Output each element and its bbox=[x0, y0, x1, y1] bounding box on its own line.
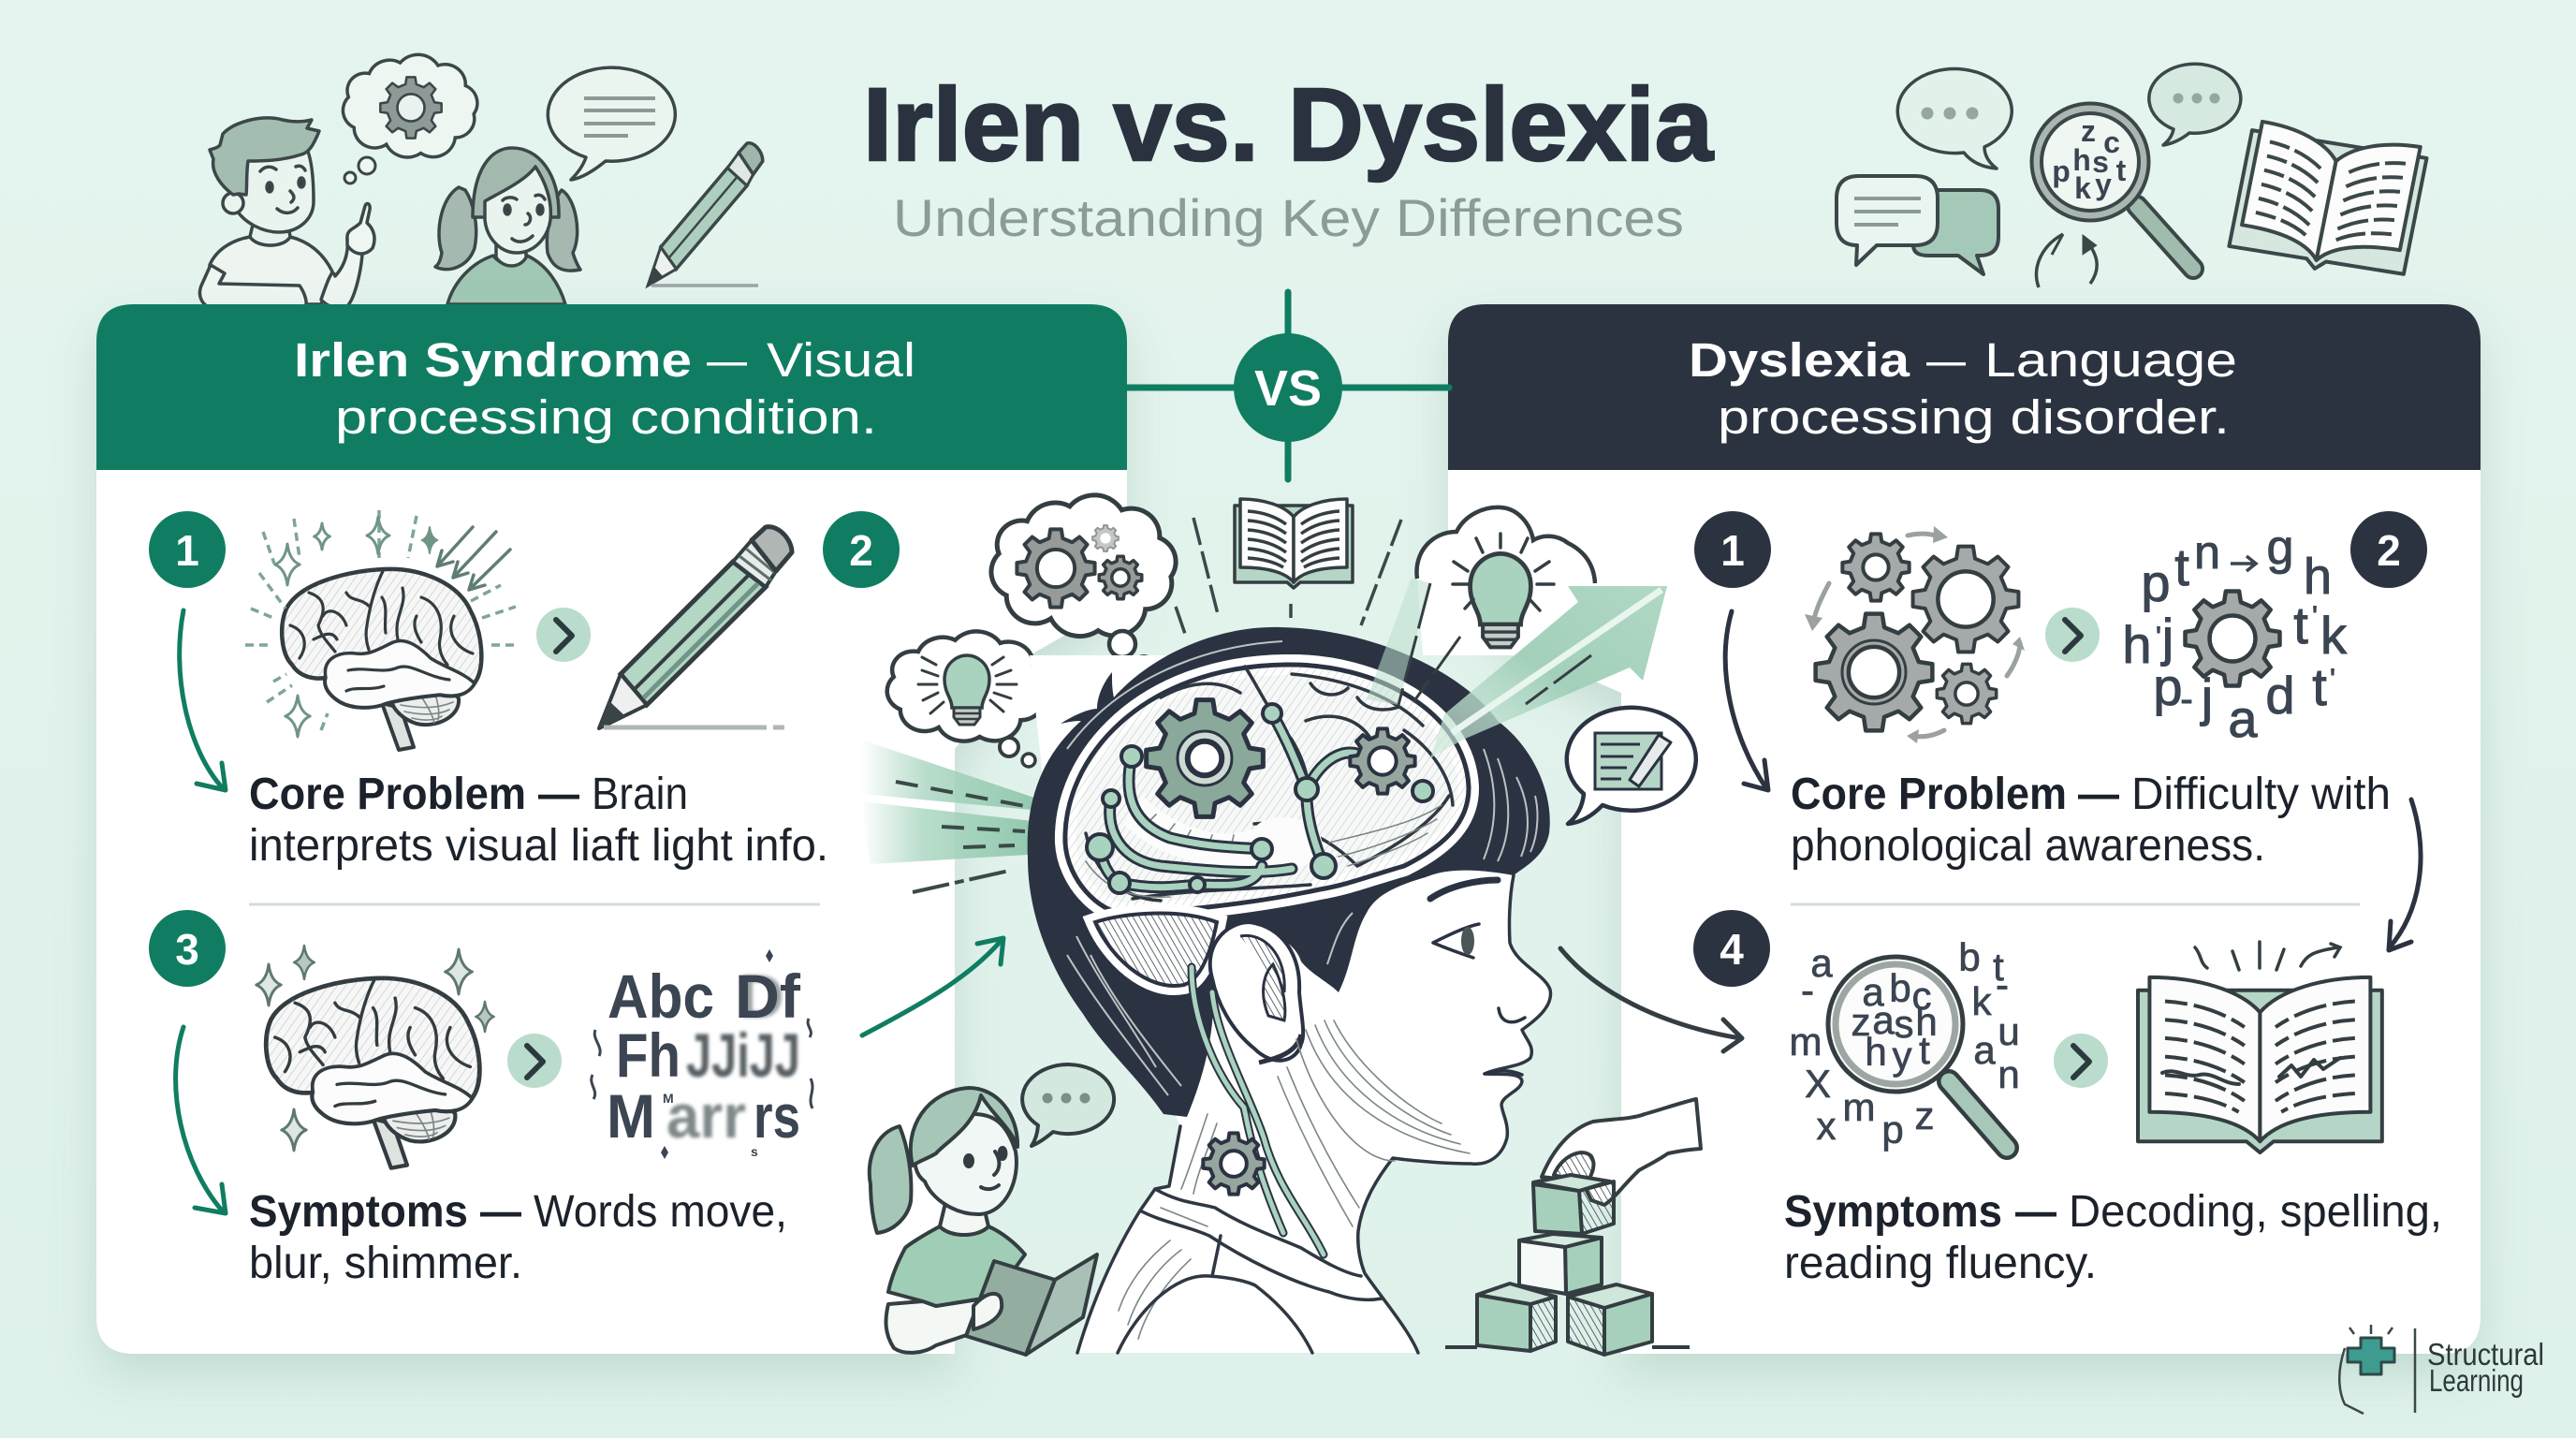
icon: gear with scattered letters: h bbox=[2122, 615, 2152, 674]
panel heading: Dyslexia bbox=[1448, 304, 2481, 470]
step badge 1 Irlen: 1 bbox=[175, 526, 199, 575]
icon: boy pointing bbox=[200, 118, 374, 309]
step badge 3 Irlen bbox=[149, 910, 226, 987]
text: Core Problem Dyslexia: Difficulty with bbox=[2131, 770, 2391, 819]
panel heading: Dyslexia: processing disorder. bbox=[1718, 390, 2230, 444]
icon: gear with scattered letters: j bbox=[2160, 608, 2174, 667]
facial profile outline bbox=[1358, 875, 1551, 1353]
icon: gear with scattered letters: k bbox=[2320, 606, 2348, 665]
icon: blurred moving letters: JJiJJ bbox=[686, 1020, 800, 1090]
icon: gear with scattered letters: p bbox=[2141, 553, 2171, 612]
icon: magnifier over scattered letters: n bbox=[1998, 1052, 2020, 1096]
text: Core Problem Dyslexia: Core Problem bbox=[1791, 770, 2067, 819]
VS badge with connector lines: VS bbox=[1254, 360, 1322, 417]
text: Core Problem Irlen: Brain bbox=[592, 770, 688, 819]
icon: magnifier over scattered letters: c bbox=[1911, 974, 1932, 1018]
icon: open book bbox=[2228, 121, 2429, 283]
icon: gear with scattered letters: t bbox=[2293, 595, 2308, 654]
icon: speech bubble small bbox=[2149, 64, 2241, 145]
subtitle: Understanding Key Differences bbox=[893, 188, 1684, 247]
text: Symptoms Dyslexia bbox=[1784, 1187, 2442, 1288]
icon: blurred moving letters: Abc bbox=[607, 961, 714, 1031]
icon: gear with scattered letters: ' bbox=[2330, 664, 2335, 695]
curved arrow to head bbox=[862, 938, 1003, 1035]
icon: blurred moving letters: M bbox=[607, 1081, 655, 1151]
icon: blurred moving letters: arr bbox=[666, 1081, 746, 1151]
panel: Irlen Syndrome card bbox=[96, 304, 1127, 1354]
step badge 3 Irlen: 3 bbox=[175, 925, 199, 974]
icon: magnifying glass with letters: t bbox=[2116, 154, 2127, 187]
neck hatching bbox=[1119, 1020, 1470, 1339]
icon: chat bubbles bbox=[1837, 176, 1998, 274]
icon: magnifier over scattered letters: t bbox=[1919, 1028, 1930, 1072]
curved arrow bbox=[2389, 800, 2421, 950]
brain with gears and circuits bbox=[1065, 665, 1469, 913]
icon: magnifier over scattered letters: k bbox=[1971, 979, 1992, 1023]
large upward arrow out of head bbox=[1367, 578, 1667, 758]
icon: magnifier over scattered letters: m bbox=[1790, 1020, 1822, 1064]
icon: magnifier over scattered letters: X bbox=[1805, 1062, 1831, 1106]
icon: pencil bbox=[648, 143, 763, 286]
icon: pencil writing bbox=[599, 527, 792, 728]
child reading a book bbox=[870, 1088, 1097, 1355]
icon: gear with scattered letters: d bbox=[2265, 666, 2295, 725]
icon: gear with scattered letters: t bbox=[2312, 657, 2327, 716]
curved arrow from head to symptoms bbox=[1560, 948, 1742, 1051]
icon: brain with incoming light bbox=[245, 510, 518, 750]
step badge 4 Dyslexia: 4 bbox=[1720, 925, 1744, 974]
curved arrow bbox=[176, 1027, 226, 1213]
icon: magnifier over scattered letters: x bbox=[1816, 1104, 1837, 1148]
shirt collar and body lines bbox=[1077, 1126, 1382, 1353]
panel heading: Dyslexia: — bbox=[1926, 333, 1966, 387]
icon: magnifier over scattered letters: s bbox=[1895, 1002, 1913, 1046]
neck circuit wires bbox=[1192, 967, 1324, 1255]
panel: Dyslexia card bbox=[1448, 304, 2481, 1354]
icon: magnifier over scattered letters: h bbox=[1915, 1000, 1938, 1044]
title: Irlen vs. Dyslexia bbox=[863, 67, 1714, 183]
icon: magnifying glass with letters: y bbox=[2095, 168, 2112, 201]
icon: gear with scattered letters: n bbox=[2194, 526, 2220, 579]
step badge 1 Dyslexia bbox=[1694, 511, 1771, 588]
arrow chevron bbox=[536, 608, 591, 662]
arrow chevron bbox=[507, 1034, 562, 1088]
light beams entering head bbox=[861, 740, 1060, 892]
step badge 4 Dyslexia bbox=[1693, 910, 1770, 987]
icon: magnifier over scattered letters: z bbox=[1852, 1000, 1870, 1044]
thought cloud with gears bbox=[991, 495, 1176, 675]
icon: open book with rippling text bbox=[2138, 942, 2382, 1152]
icon: magnifying glass with letters: h bbox=[2072, 143, 2091, 177]
icon: blurred moving letters bbox=[592, 949, 812, 1159]
icon: brain with sparkles bbox=[256, 946, 494, 1168]
icon: magnifier over scattered letters: - bbox=[1801, 968, 1814, 1012]
icon: gear with scattered letters bbox=[2122, 521, 2348, 748]
text: Symptoms Irlen: blur, shimmer. bbox=[249, 1239, 522, 1288]
face features: brow, eye, nostril, mouth bbox=[1430, 880, 1525, 1075]
panel heading: Irlen Syndrome: Visual bbox=[767, 333, 915, 387]
icon: speech bubble large bbox=[1897, 69, 2012, 169]
icon: magnifying glass with letters: z bbox=[2081, 114, 2096, 148]
hair bbox=[1028, 627, 1550, 1117]
panel heading: Irlen Syndrome bbox=[96, 304, 1127, 470]
icon: girl with pigtails bbox=[435, 148, 580, 304]
curved arrow bbox=[1725, 611, 1768, 790]
icon: gear with scattered letters: ' bbox=[2156, 622, 2161, 653]
icon: magnifying glass with letters: k bbox=[2074, 171, 2091, 205]
step badge 2 Dyslexia: 2 bbox=[2377, 526, 2401, 575]
illustration: central child with brain bbox=[861, 495, 1701, 1355]
text: Core Problem Dyslexia: phonological awareness. bbox=[1791, 821, 2265, 871]
icon: magnifier over scattered letters: p bbox=[1881, 1108, 1904, 1152]
step badge 2 Irlen: 2 bbox=[849, 526, 873, 575]
panel heading: Dyslexia: Language bbox=[1984, 333, 2237, 387]
icon: magnifier over scattered letters: a bbox=[1810, 941, 1833, 985]
brain band bbox=[1065, 665, 1469, 913]
panel heading: Irlen Syndrome: — bbox=[707, 333, 747, 387]
icon: magnifier over scattered letters: u bbox=[1998, 1009, 2020, 1053]
icon: magnifying glass with letters bbox=[2032, 104, 2193, 287]
icon: blurred moving letters: Df bbox=[735, 961, 801, 1031]
icon: gear with scattered letters: g bbox=[2267, 521, 2293, 575]
curved arrow bbox=[180, 610, 226, 790]
panel heading: Irlen Syndrome: processing condition. bbox=[335, 390, 877, 444]
icon: blurred moving letters: Fh bbox=[616, 1020, 681, 1090]
icon: thought cloud with gear bbox=[343, 54, 477, 183]
text: Symptoms Dyslexia: reading fluency. bbox=[1784, 1239, 2097, 1288]
logo: Structural Learning bbox=[2339, 1325, 2544, 1414]
text: Symptoms Dyslexia: Symptoms bbox=[1784, 1187, 2002, 1237]
icon: gear with scattered letters: t bbox=[2174, 537, 2189, 596]
cerebellum bbox=[1095, 914, 1217, 986]
ear bbox=[1210, 922, 1303, 1063]
panel heading: Dyslexia: Dyslexia bbox=[1689, 333, 1910, 387]
neck gear bbox=[1203, 1133, 1265, 1195]
text: Symptoms Irlen: Symptoms bbox=[249, 1187, 468, 1237]
icon: magnifier over scattered letters: y bbox=[1893, 1034, 1911, 1078]
icon: blurred moving letters: s bbox=[751, 1144, 758, 1159]
stacked blocks with hand bbox=[1445, 1099, 1701, 1355]
text: Core Problem Irlen: — bbox=[538, 770, 579, 819]
icon: gear with scattered letters: h bbox=[2304, 549, 2332, 605]
icon: gear with scattered letters: p bbox=[2153, 657, 2183, 716]
icon: magnifier over scattered letters: z bbox=[1915, 1093, 1934, 1137]
text: Core Problem Irlen: Core Problem bbox=[249, 770, 526, 819]
text: Symptoms Irlen bbox=[249, 1187, 787, 1288]
VS badge with connector lines bbox=[1127, 292, 1449, 479]
icon: magnifying glass with letters: s bbox=[2092, 145, 2109, 179]
icon: magnifier over scattered letters: b bbox=[1889, 966, 1911, 1010]
speech bubble with dots bbox=[1022, 1064, 1114, 1146]
logo: Structural Learning: Learning bbox=[2429, 1363, 2524, 1398]
text: Core Problem Dyslexia: — bbox=[2078, 770, 2119, 819]
icon: speech bubble with lines bbox=[548, 67, 675, 180]
arrow chevron bbox=[2054, 1034, 2108, 1088]
icon: turning gears bbox=[1805, 526, 2025, 743]
text: Core Problem Irlen: interprets visual liaft light info. bbox=[249, 821, 828, 871]
icon: magnifier over scattered letters: a bbox=[1862, 970, 1884, 1014]
thought cloud with lightbulb, top right bbox=[1416, 507, 1595, 655]
arrow chevron bbox=[2045, 608, 2100, 662]
icon: magnifier over scattered letters: - bbox=[1996, 962, 2009, 1006]
icon: blurred moving letters: M bbox=[663, 1091, 674, 1106]
icon: gear with scattered letters: - bbox=[2180, 679, 2193, 720]
icon: magnifier over scattered letters: h bbox=[1865, 1030, 1887, 1074]
icon: blurred moving letters: D bbox=[739, 961, 784, 1031]
icon: magnifier over scattered letters: m bbox=[1842, 1085, 1876, 1129]
icon: magnifier over scattered letters: a bbox=[1973, 1028, 1996, 1072]
illustration: children, thought bubble, speech bubble and pencil (top left) bbox=[200, 54, 763, 309]
panel heading: Irlen Syndrome: Irlen Syndrome bbox=[294, 333, 692, 387]
icon: magnifying glass with letters: p bbox=[2052, 154, 2071, 188]
text: Core Problem Dyslexia bbox=[1791, 770, 2391, 871]
step badge 1 Dyslexia: 1 bbox=[1720, 526, 1745, 575]
step badge 2 Irlen bbox=[823, 511, 900, 588]
text: Core Problem Irlen bbox=[249, 770, 828, 871]
icon: magnifying glass with letters: c bbox=[2103, 125, 2120, 159]
text: Symptoms Dyslexia: Decoding, spelling, bbox=[2069, 1187, 2442, 1237]
icon: gear with scattered letters: a bbox=[2228, 689, 2258, 748]
icon: magnifier over scattered letters: a bbox=[1872, 998, 1895, 1042]
icon: magnifier over scattered letters: t bbox=[1993, 945, 2004, 989]
text: Symptoms Irlen: — bbox=[480, 1187, 521, 1237]
icon: blurred moving letters: rs bbox=[754, 1081, 800, 1151]
icon: gear with scattered letters: j bbox=[2200, 668, 2213, 726]
open book above head bbox=[1176, 499, 1401, 634]
logo: Structural Learning: Structural bbox=[2427, 1337, 2544, 1372]
icon: magnifier over scattered letters bbox=[1790, 935, 2020, 1152]
step badge 2 Dyslexia bbox=[2350, 511, 2427, 588]
text: Symptoms Irlen: Words move, bbox=[534, 1187, 787, 1237]
speech bubble with note and pencil bbox=[1567, 708, 1696, 824]
head, neck and shoulders bbox=[1030, 655, 1551, 1353]
text: Symptoms Dyslexia: — bbox=[2015, 1187, 2056, 1237]
illustration: chat bubbles, magnifier and book (top right) bbox=[1837, 64, 2429, 287]
thought cloud with lightbulb bbox=[887, 631, 1047, 767]
icon: magnifier over scattered letters: b bbox=[1958, 935, 1981, 979]
icon: gear with scattered letters: ' bbox=[2312, 601, 2318, 632]
step badge 1 Irlen bbox=[149, 511, 226, 588]
